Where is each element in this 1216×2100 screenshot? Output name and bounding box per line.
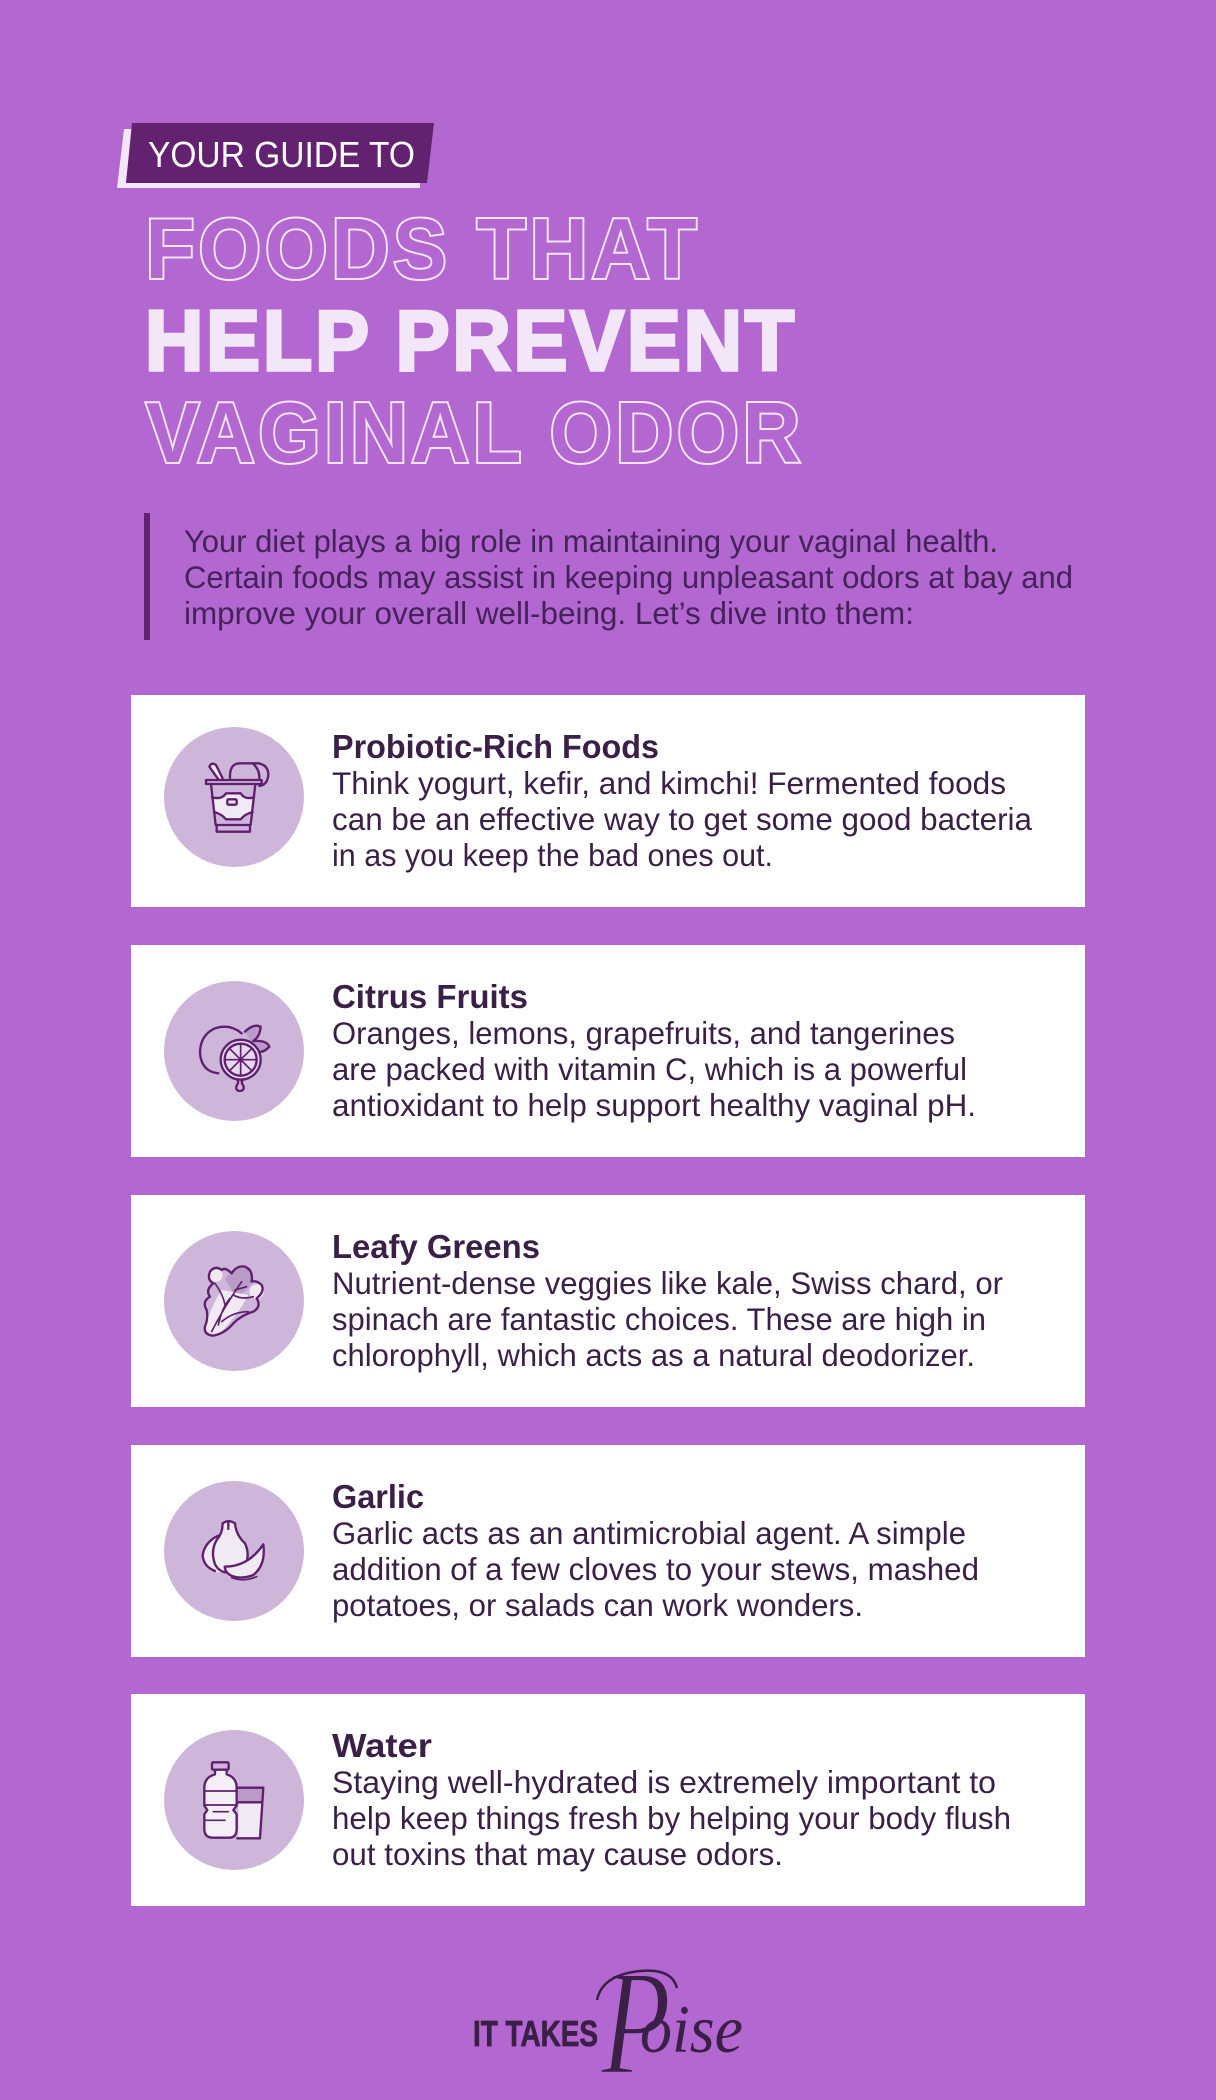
panel: probiotic-rich foods: Probiotic-Rich Foods — [332, 728, 659, 765]
panel: leafy greens: Nutrient-dense veggies like kale, Swiss chard, or — [332, 1265, 1003, 1301]
badge: your guide to: YOUR GUIDE TO — [148, 134, 415, 175]
logo: it takes poise: IT TAKES — [473, 2013, 598, 2054]
panel: probiotic-rich foods: Think yogurt, kefir, and kimchi! Fermented foods — [332, 765, 1006, 801]
icon: garlic — [202, 1521, 264, 1580]
intro text block: Certain foods may assist in keeping unpleasant odors at bay and — [184, 559, 1073, 595]
panel: garlic — [131, 1445, 1085, 1657]
title: VAGINAL ODOR — [146, 386, 804, 481]
icon: leafy greens — [205, 1266, 264, 1336]
title — [145, 202, 804, 481]
panel: citrus fruits: are packed with vitamin C, which is a powerful — [332, 1051, 967, 1087]
panel: garlic: Garlic — [332, 1478, 424, 1515]
panel: water: Water — [332, 1727, 432, 1764]
panel: citrus fruits — [131, 945, 1085, 1157]
panel: citrus fruits: Citrus Fruits — [332, 978, 528, 1015]
panel: water: out toxins that may cause odors. — [332, 1836, 783, 1872]
panel: garlic: potatoes, or salads can work wonders. — [332, 1587, 863, 1623]
title: FOODS THAT — [146, 202, 700, 297]
panel: probiotic-rich foods: can be an effective way to get some good bacteria — [332, 801, 1032, 837]
panel: leafy greens — [131, 1195, 1085, 1407]
panel: water — [131, 1694, 1085, 1906]
panel: garlic: addition of a few cloves to your stews, mashed — [332, 1551, 979, 1587]
badge: your guide to — [117, 123, 434, 188]
panel: citrus fruits: Oranges, lemons, grapefruits, and tangerines — [332, 1015, 955, 1051]
panel: water: help keep things fresh by helping your body flush — [332, 1800, 1011, 1836]
panel: water: Staying well-hydrated is extremely important to — [332, 1764, 996, 1800]
panel: garlic: Garlic acts as an antimicrobial agent. A simple — [332, 1515, 966, 1551]
panel: probiotic-rich foods: in as you keep the bad ones out. — [332, 837, 773, 873]
icon: water bottle and glass — [204, 1762, 263, 1838]
logo: it takes poise: oise — [640, 1991, 743, 2067]
intro text block: Your diet plays a big role in maintaining your vaginal health. — [184, 523, 998, 559]
panel: leafy greens: Leafy Greens — [332, 1228, 540, 1265]
icon: yogurt cup — [206, 763, 268, 832]
logo: it takes poise — [473, 1940, 743, 2100]
panel: probiotic-rich foods — [131, 695, 1085, 907]
panel: citrus fruits: antioxidant to help support healthy vaginal pH. — [332, 1087, 976, 1123]
intro text block — [144, 513, 1073, 640]
intro text block: improve your overall well-being. Let’s dive into them: — [184, 595, 914, 631]
title: HELP PREVENT — [145, 294, 797, 389]
icon: citrus — [200, 1026, 269, 1091]
panel: leafy greens: spinach are fantastic choices. These are high in — [332, 1301, 986, 1337]
panel: leafy greens: chlorophyll, which acts as a natural deodorizer. — [332, 1337, 975, 1373]
